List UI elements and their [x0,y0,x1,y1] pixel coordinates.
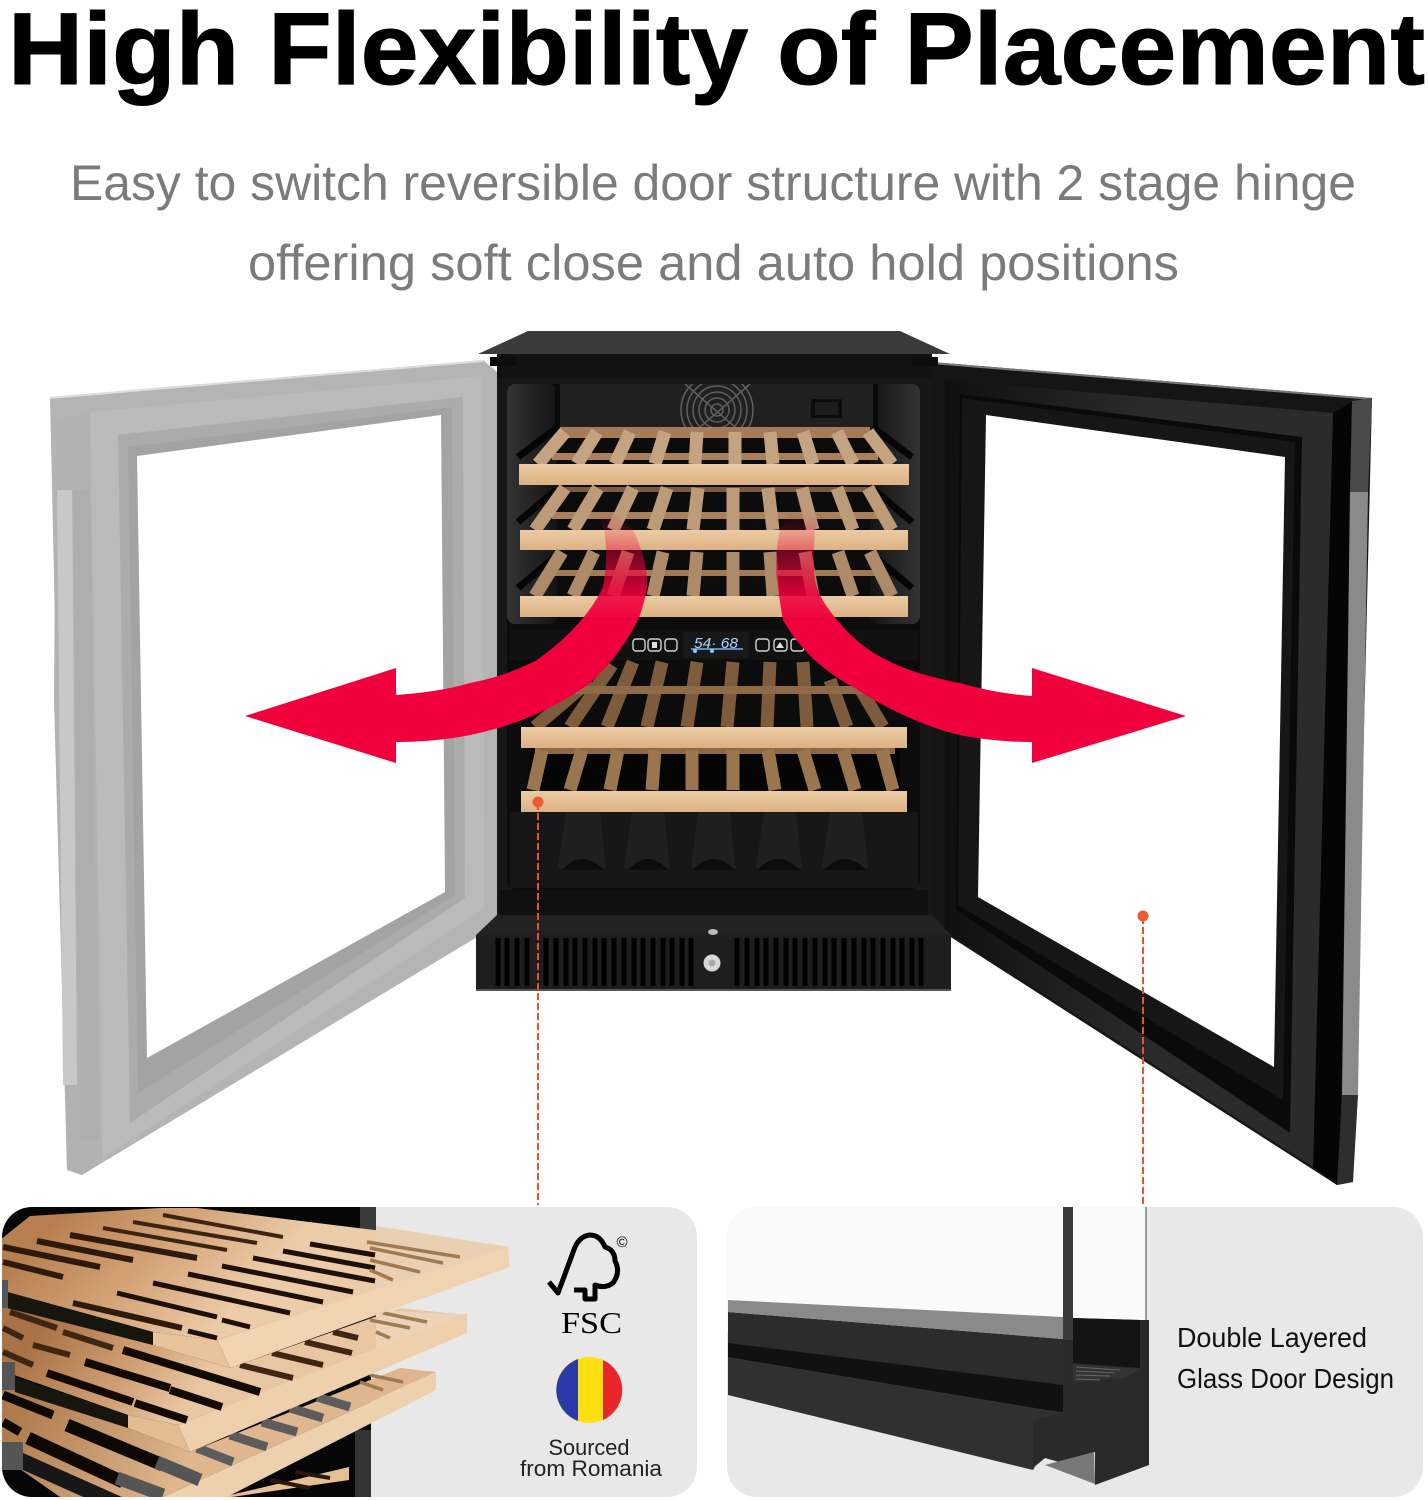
cabinet frame [497,354,932,919]
panel: double layered glass [727,1207,1423,1497]
glass label: Double Layered [1177,1322,1367,1353]
wine cooler cabinet [476,331,951,991]
runner 3 [23,1453,122,1500]
sourced label [520,1435,663,1481]
runner 2 [15,1377,128,1428]
icon: FSC tree logo [549,1234,628,1340]
vent box [811,399,842,418]
glass door cross-section [727,1207,1149,1485]
subtitle: offering soft close and auto hold positions [248,235,1179,291]
icon: lock [704,954,720,972]
FSC label: FSC [561,1305,622,1340]
control panel [510,630,918,660]
callout line: glass door [1138,910,1148,1207]
left door (open, greyed) [50,360,497,1175]
subtitle [70,155,1356,291]
shelves photo [0,1207,510,1500]
display readout: 54· 68 [694,635,739,652]
panel: wood shelves [0,1207,697,1500]
shelf 2 [0,1305,467,1452]
shelf 1 [0,1208,510,1368]
shelf 4 [521,662,907,748]
shelf 5 [521,748,907,812]
panel buttons [633,639,804,651]
top slab [478,331,950,354]
icon: Romania flag [556,1357,622,1423]
left door window [137,415,445,1058]
interior [507,384,920,890]
right door (open, black) [932,362,1372,1185]
bottle rest humps [500,812,928,918]
shelf 3 [0,1368,436,1500]
glass label [1177,1322,1394,1394]
arrow: left airflow [245,512,647,763]
shelf 3 [520,552,908,617]
subtitle: Easy to switch reversible door structure with 2 stage hinge [70,155,1356,211]
shelf 1 [519,427,909,485]
runner 1 [7,1292,153,1345]
right door window [978,415,1285,1067]
arrow: right airflow [776,512,1186,763]
icon: fan grille [680,384,754,427]
icon: FSC tree logo: © [616,1234,628,1251]
shelf 2 [520,487,908,550]
glass label: Glass Door Design [1177,1363,1394,1394]
callout line: wood shelf [532,796,544,1205]
shelf 4 [222,1467,349,1497]
base plinth with vents [476,915,951,991]
sourced label: Sourced [548,1435,630,1460]
sourced label: from Romania [520,1456,663,1481]
side rails [518,427,912,588]
